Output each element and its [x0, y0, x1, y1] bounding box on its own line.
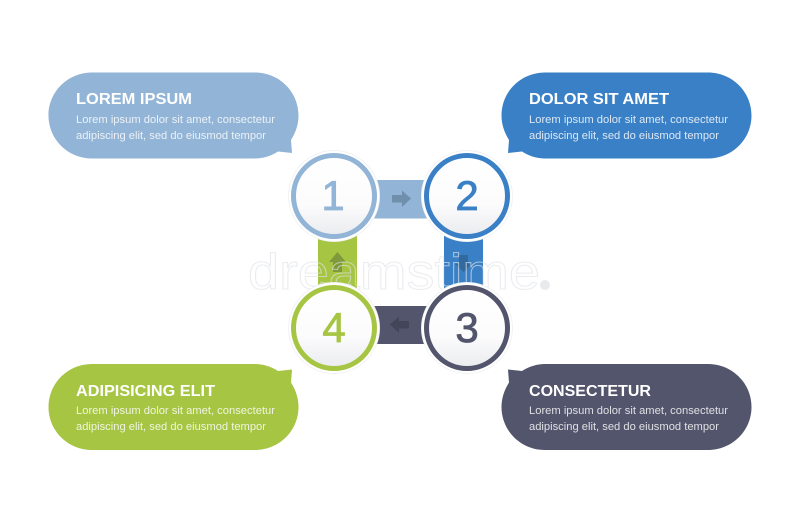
text: adipisicing elit body: Lorem ipsum dolor sit amet, consectetur — [76, 405, 275, 417]
panel: lorem ipsum callout — [48, 72, 298, 158]
heading: adipisicing elit: ADIPISICING ELIT — [76, 383, 216, 400]
watermark: dreamstime — [248, 244, 540, 300]
step 2 circle — [422, 150, 512, 242]
connector: step 4 to 1 with arrow — [318, 230, 357, 294]
text: consectetur body: adipiscing elit, sed do eiusmod tempor — [529, 421, 719, 433]
heading: lorem ipsum: LOREM IPSUM — [76, 91, 192, 108]
connector: step 1 to 2 with arrow — [370, 180, 430, 218]
number 4: 4 — [322, 304, 346, 351]
panel: adipisicing elit callout — [48, 364, 298, 450]
text: consectetur body: Lorem ipsum dolor sit amet, consectetur — [529, 405, 728, 417]
number 3: 3 — [455, 304, 479, 351]
step 4 circle — [288, 282, 380, 374]
text: dolor sit amet body: adipiscing elit, sed do eiusmod tempor — [529, 130, 719, 142]
panel: consectetur callout — [502, 364, 752, 450]
connector: step 3 to 4 with arrow — [370, 306, 430, 344]
step 3 circle — [422, 282, 512, 374]
panel: dolor sit amet callout — [502, 72, 752, 158]
heading: dolor sit amet: DOLOR SIT AMET — [529, 91, 670, 108]
watermark registered mark — [540, 280, 550, 290]
step 1 circle — [288, 150, 380, 242]
text: lorem ipsum body: adipiscing elit, sed do eiusmod tempor — [76, 130, 266, 142]
text: dolor sit amet body: Lorem ipsum dolor sit amet, consectetur — [529, 114, 728, 126]
connector: step 2 to 3 with arrow — [444, 230, 483, 294]
number 2: 2 — [455, 172, 479, 219]
text: adipisicing elit body: adipiscing elit, sed do eiusmod tempor — [76, 421, 266, 433]
number 1: 1 — [321, 172, 345, 219]
text: lorem ipsum body: Lorem ipsum dolor sit amet, consectetur — [76, 114, 275, 126]
heading: consectetur: CONSECTETUR — [529, 383, 651, 400]
